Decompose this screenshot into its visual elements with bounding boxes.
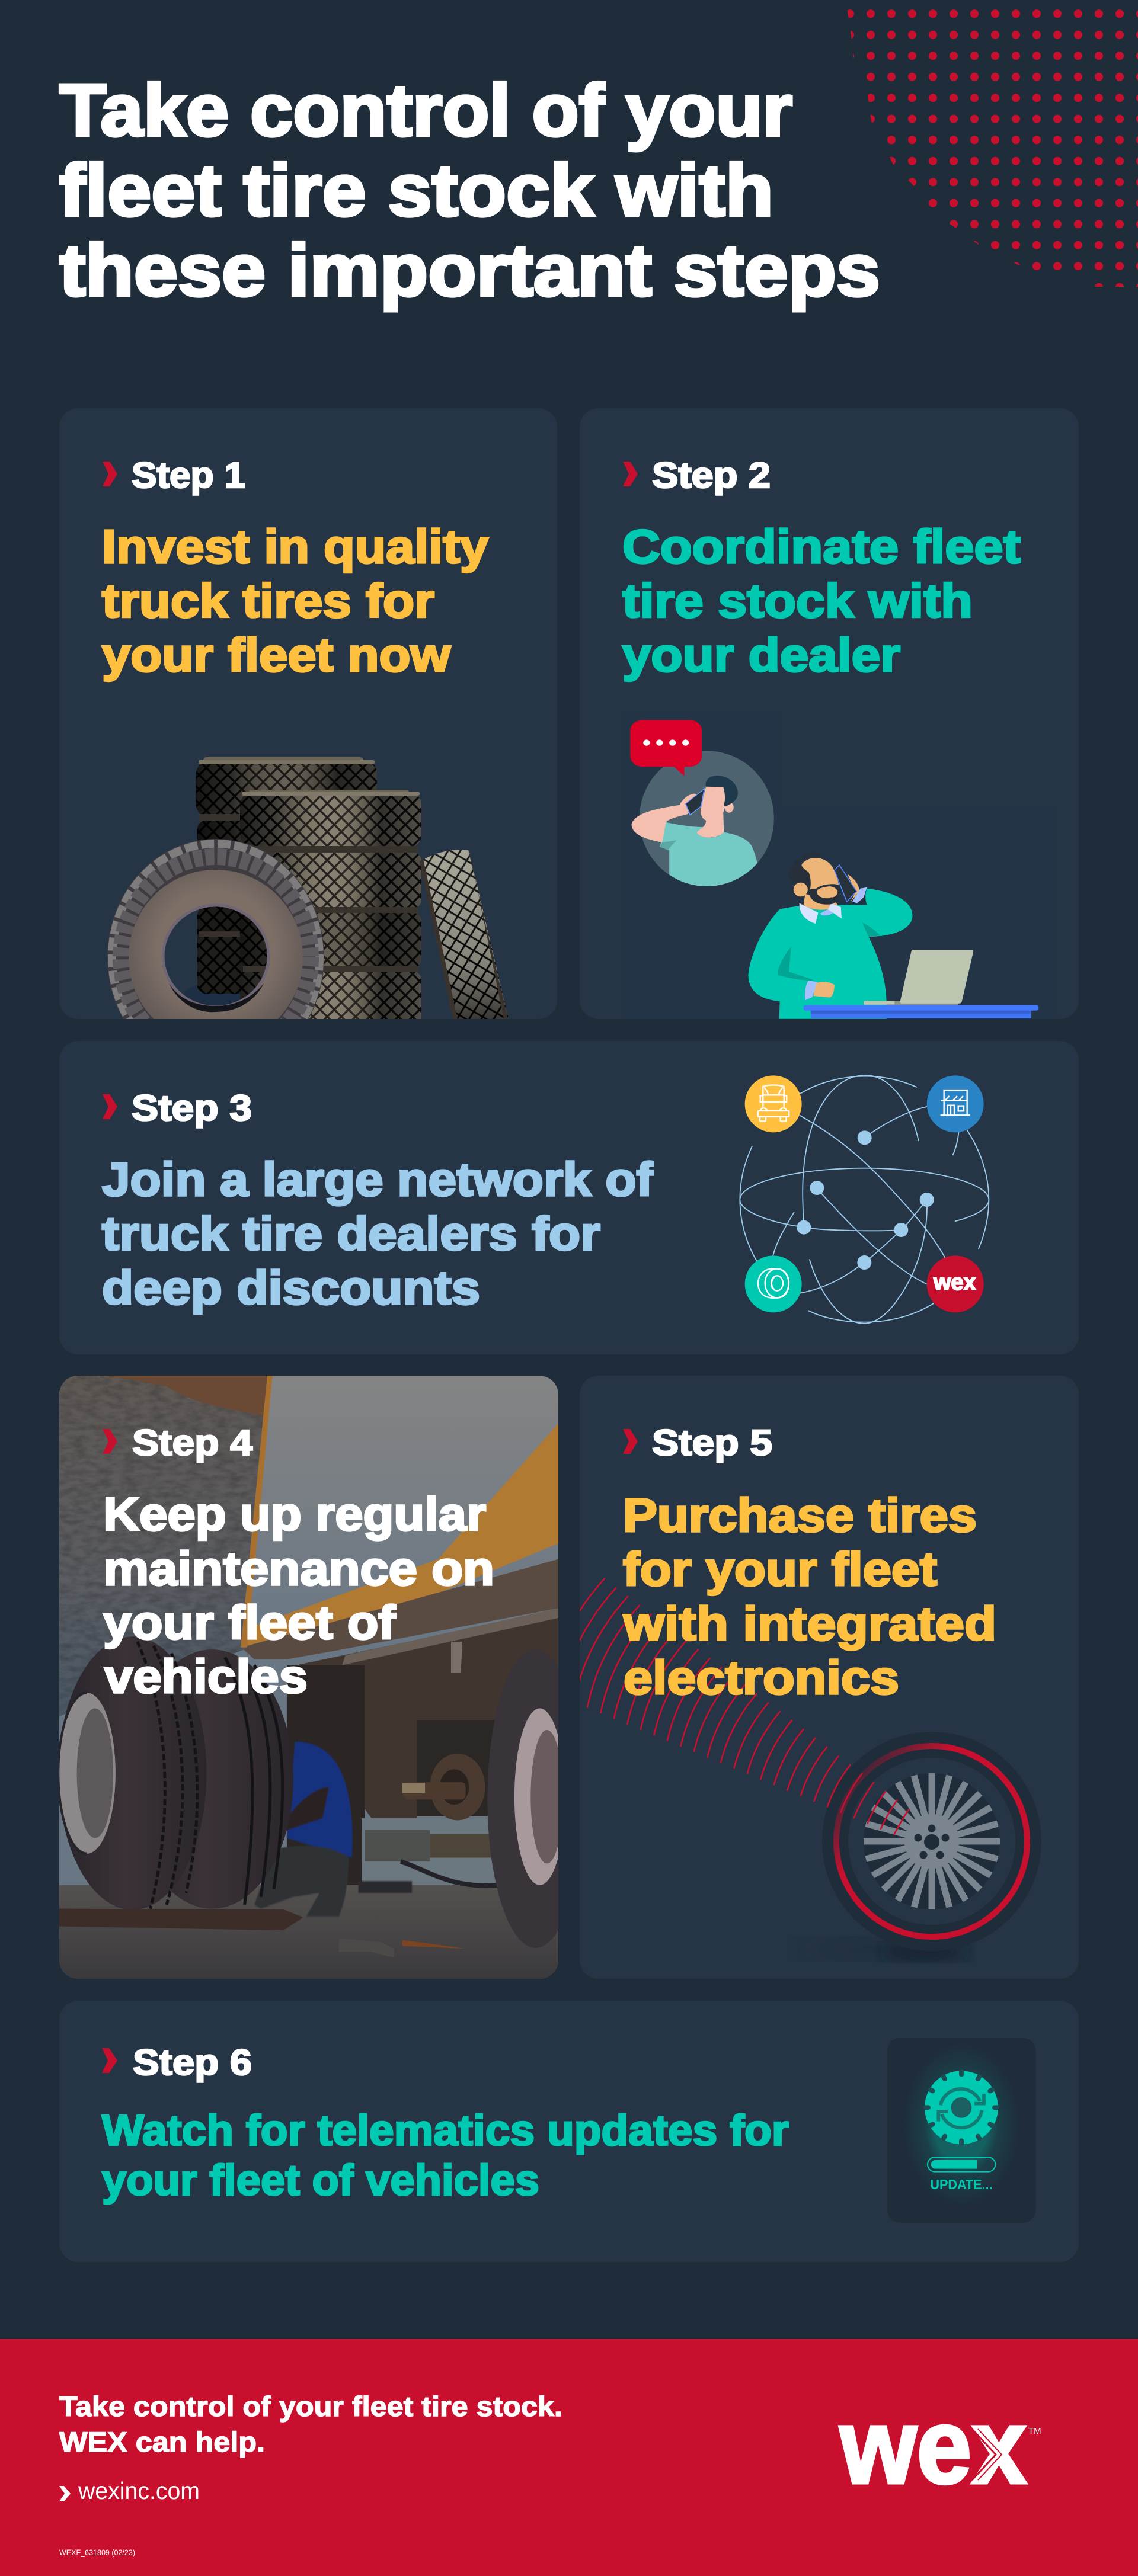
worker	[254, 1742, 412, 1917]
front tire stack	[240, 790, 421, 1025]
footer band	[0, 2339, 1138, 2576]
progress bar	[928, 2157, 995, 2172]
step 1 heading: truck tires for	[102, 575, 434, 627]
step 4 heading: your fleet of	[103, 1596, 395, 1649]
step 2 heading: Coordinate fleet	[622, 520, 1021, 573]
stacked spare tires	[58, 1636, 293, 1910]
right truck wheel	[487, 1649, 558, 1948]
title	[59, 69, 880, 312]
wheel hub	[904, 1814, 959, 1869]
icon: store	[927, 1075, 984, 1132]
step 6 heading: your fleet of vehicles	[102, 2157, 539, 2205]
step 2 heading	[622, 520, 1021, 681]
step 5 label: Step 5	[652, 1422, 772, 1463]
step 5 heading: with integrated	[623, 1597, 996, 1650]
network lines	[740, 1075, 989, 1324]
laptop	[864, 950, 973, 1005]
step 2 heading: tire stock with	[622, 575, 973, 627]
network globe diagram	[740, 1075, 989, 1324]
step 3 heading	[102, 1153, 653, 1314]
step 1 label: Step 1	[132, 455, 245, 495]
document code: WEXF_631809 (02/23)	[59, 2548, 135, 2557]
step 5 heading: Purchase tires	[623, 1489, 977, 1542]
step 2 label: Step 2	[652, 455, 771, 495]
footer message	[59, 2391, 562, 2458]
update label: UPDATE...	[930, 2177, 993, 2192]
step 3 heading: Join a large network of	[102, 1153, 653, 1206]
sound wave arcs	[547, 1578, 909, 1835]
step 1 heading	[102, 520, 489, 681]
wex logo: wex	[839, 2387, 1027, 2506]
step 3 heading: deep discounts	[102, 1261, 480, 1314]
step 5 heading	[623, 1489, 996, 1704]
panel: step 1	[59, 408, 557, 1076]
footer message: WEX can help.	[59, 2426, 265, 2458]
tools on ground	[339, 1938, 466, 1958]
front upright tire	[107, 839, 324, 1019]
step 4 heading: maintenance on	[103, 1542, 494, 1595]
icon: truck	[745, 1075, 802, 1132]
step 4 heading: Keep up regular	[103, 1488, 486, 1540]
title: these important steps	[59, 229, 880, 312]
icon: tire	[745, 1255, 802, 1312]
man at laptop	[748, 853, 912, 1019]
step 3 label: Step 3	[132, 1088, 252, 1128]
step 4 heading	[103, 1488, 494, 1703]
illustration: two people on the phone	[622, 711, 1056, 1019]
network nodes	[797, 1130, 934, 1270]
step 1 heading: Invest in quality	[102, 520, 489, 573]
step 5 heading: electronics	[624, 1651, 899, 1704]
back tire stack	[196, 757, 377, 994]
step 1 heading: your fleet now	[102, 629, 451, 681]
wheel spokes	[864, 1773, 1000, 1909]
panel: step 5	[547, 1376, 1079, 1979]
footer message: Take control of your fleet tire stock.	[59, 2391, 562, 2422]
step 4 label: Step 4	[132, 1422, 252, 1463]
step 6 heading: Watch for telematics updates for	[102, 2107, 789, 2155]
step 6 label: Step 6	[133, 2042, 252, 2082]
illustration: stack of tires	[107, 757, 509, 1019]
step 2 heading: your dealer	[622, 629, 900, 681]
panel: step 2	[580, 408, 1079, 1019]
step 3 heading: truck tire dealers for	[102, 1207, 600, 1260]
step 5 heading: for your fleet	[623, 1543, 937, 1595]
step 6 heading	[102, 2107, 789, 2205]
desk	[804, 1005, 1038, 1018]
panel: step 6	[59, 2001, 1079, 2262]
title: fleet tire stock with	[59, 149, 773, 232]
illustration: smart wheel	[806, 1732, 1041, 1962]
icon: wex logo: wex	[933, 1269, 976, 1295]
decorative dot pattern	[842, 0, 1138, 290]
person in circle	[632, 751, 774, 892]
wex logo: TM	[1028, 2426, 1041, 2436]
speech bubble	[630, 720, 702, 776]
panel: step 3	[59, 1041, 1079, 1354]
website link: wexinc.com	[78, 2477, 200, 2504]
wooden plank	[59, 1909, 303, 1930]
icon: wex logo	[927, 1255, 984, 1312]
icon: software update device	[887, 2038, 1036, 2223]
photo: mechanic changing truck tires	[58, 1374, 584, 1979]
panel: step 4 photo	[58, 1374, 584, 1979]
title: Take control of your	[59, 69, 792, 152]
leaning tire	[420, 850, 509, 1019]
gear	[925, 2071, 998, 2144]
step 4 heading: vehicles	[104, 1650, 308, 1703]
